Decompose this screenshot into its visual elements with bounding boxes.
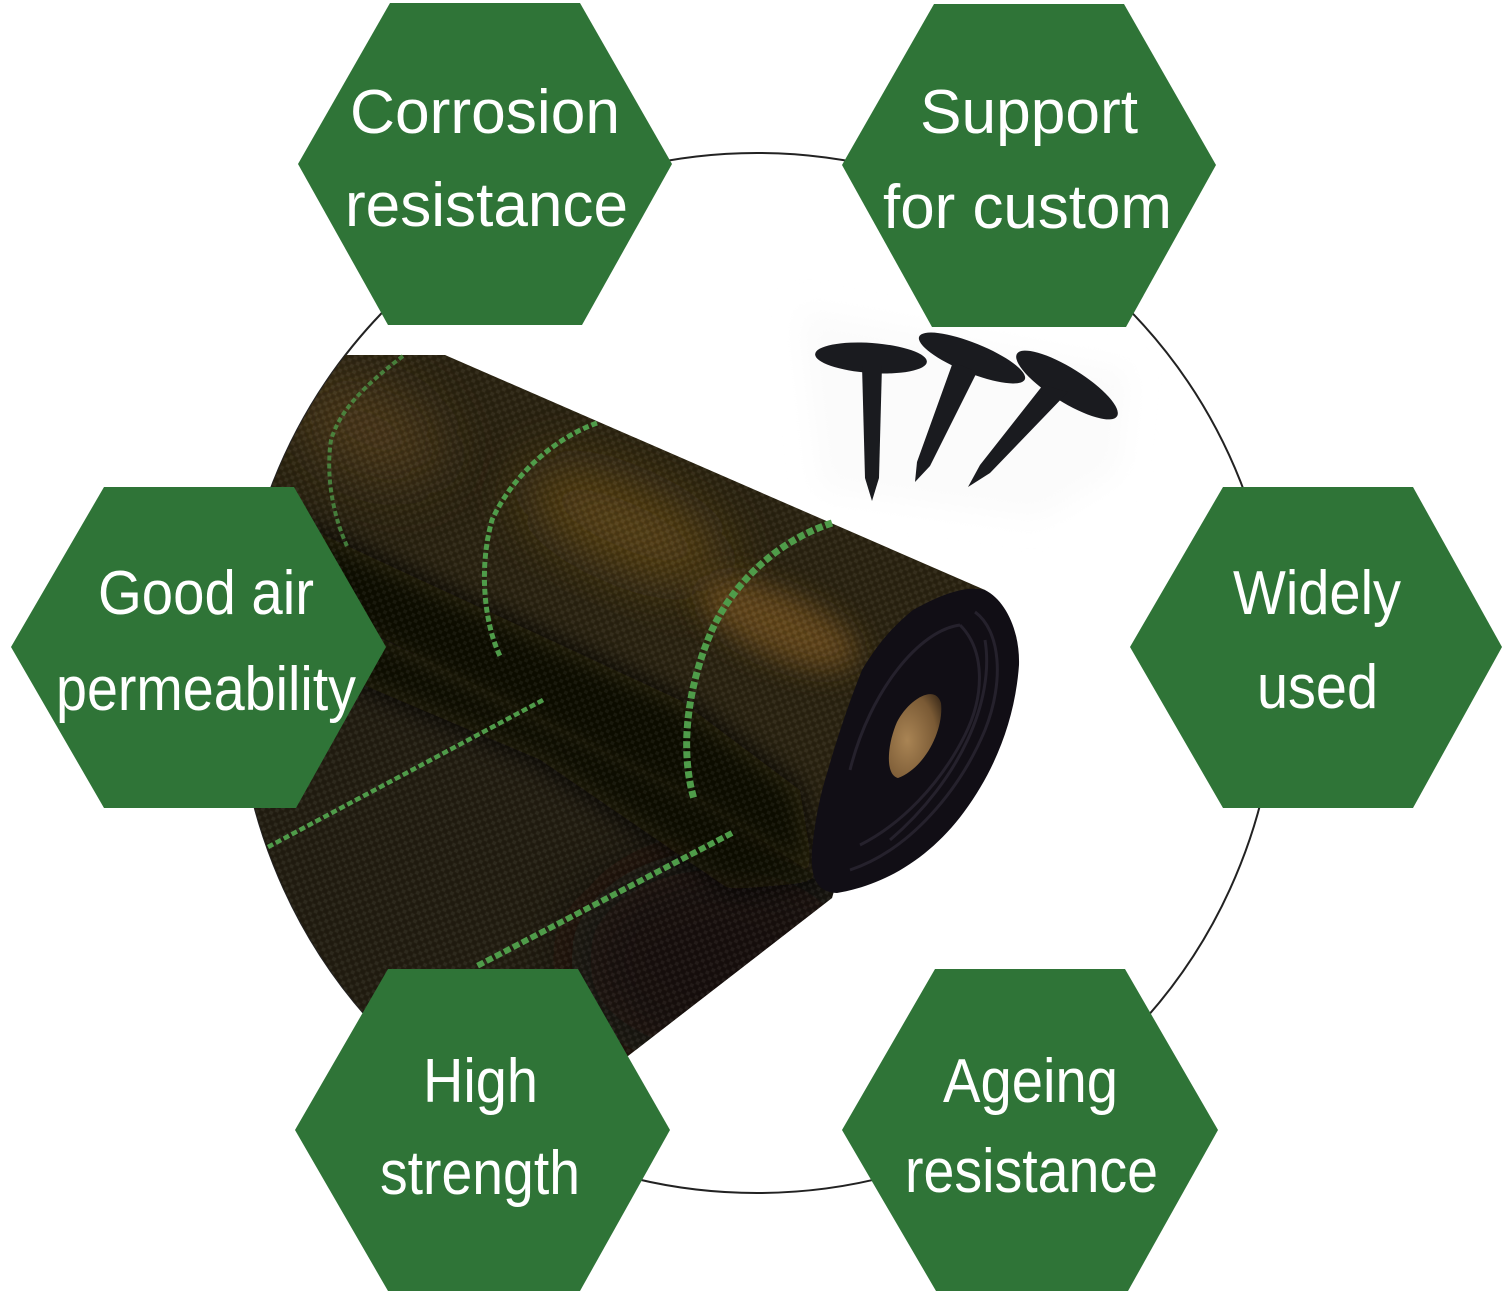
hexagon: High strength: High bbox=[423, 1047, 538, 1116]
plastic pegs photo bbox=[800, 310, 1130, 520]
hexagon: Ageing resistance: Ageing bbox=[943, 1047, 1118, 1116]
peg 2 bbox=[914, 323, 1030, 482]
cardboard core bbox=[889, 694, 941, 778]
hexagon: Widely used: Widely bbox=[1233, 559, 1401, 628]
hexagon: Good air permeability: permeability bbox=[56, 655, 356, 724]
hexagon: Widely used bbox=[1130, 487, 1502, 808]
flat unrolled fabric bbox=[255, 636, 834, 1056]
hexagon: Ageing resistance bbox=[842, 969, 1218, 1291]
hexagon: Support for custom: Support bbox=[920, 78, 1138, 147]
faint photo background bbox=[800, 310, 1130, 520]
peg 3 bbox=[968, 339, 1126, 487]
photo: fabric roll bbox=[230, 355, 1019, 1070]
roll body bbox=[250, 355, 985, 880]
hexagon: Corrosion resistance bbox=[298, 3, 672, 325]
hexagon: Widely used: used bbox=[1257, 653, 1378, 722]
hexagon: Corrosion resistance: Corrosion bbox=[350, 78, 620, 147]
hexagon: Ageing resistance: resistance bbox=[905, 1137, 1158, 1206]
peg 1 bbox=[814, 339, 928, 501]
hexagon: Corrosion resistance: resistance bbox=[345, 171, 628, 240]
hexagon: Support for custom bbox=[842, 4, 1216, 327]
hexagon: Good air permeability bbox=[11, 487, 386, 808]
hexagon: Support for custom: for custom bbox=[883, 173, 1172, 242]
roll end with core bbox=[812, 589, 1019, 893]
ring outline bbox=[237, 153, 1277, 1193]
hexagon: Good air permeability: Good air bbox=[98, 559, 314, 628]
hexagon: High strength bbox=[295, 969, 670, 1291]
green stripes bbox=[268, 356, 832, 966]
hexagon: High strength: strength bbox=[380, 1139, 580, 1208]
